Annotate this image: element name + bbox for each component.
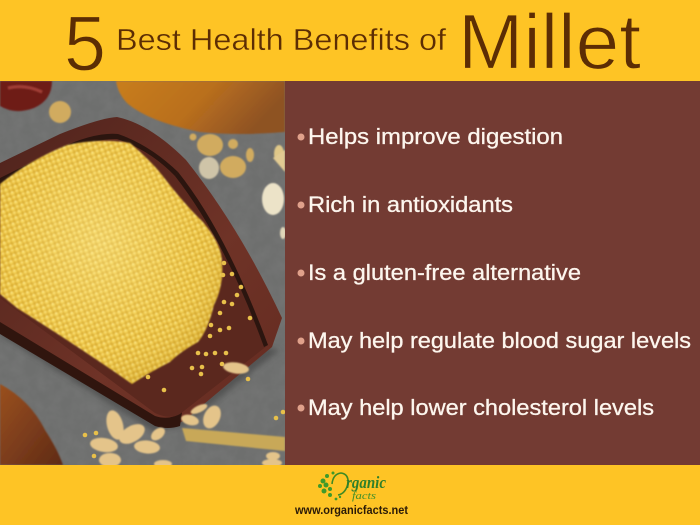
benefit 1: Helps improve digestion <box>308 124 563 149</box>
logo: Organic Facts <box>318 472 386 502</box>
oat flakes and straw <box>89 361 285 468</box>
round seeds top right <box>49 101 286 239</box>
photo: millet in a wooden scoop <box>0 81 286 468</box>
logo: Organic Facts: rganic <box>346 473 386 492</box>
title: Best Health Benefits of <box>116 22 446 57</box>
logo: Organic Facts: facts <box>352 490 376 502</box>
title <box>64 0 641 87</box>
scattered grains <box>83 261 285 458</box>
benefit 3: Is a gluten-free alternative <box>308 260 581 285</box>
brown benefits panel <box>285 81 700 465</box>
millet grain pile <box>0 141 285 458</box>
scoop shadow <box>0 334 278 432</box>
orange leaf top <box>116 81 285 134</box>
footer band <box>0 465 700 525</box>
title: Millet <box>458 0 641 86</box>
brown leaf bottom left <box>0 384 63 465</box>
benefit 2: Rich in antioxidants <box>308 192 513 217</box>
benefit 4: May help regulate blood sugar levels <box>308 328 691 353</box>
title: 5 <box>64 0 106 87</box>
header band <box>0 0 700 81</box>
benefit 5: May help lower cholesterol levels <box>308 395 654 420</box>
wooden scoop <box>0 117 282 428</box>
website url: www.organicfacts.net <box>294 505 408 517</box>
dried chilli <box>0 81 52 111</box>
